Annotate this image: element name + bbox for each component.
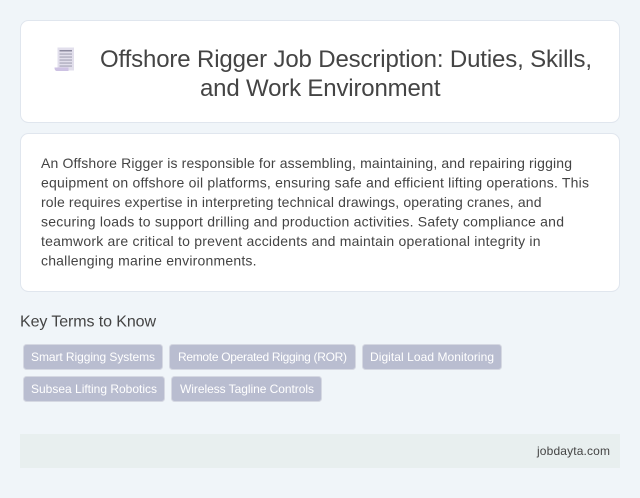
tag: remote operated rigging bbox=[170, 344, 356, 370]
text block: description: role requires expertise in interpreting technical drawings, operating cranes, and bbox=[41, 194, 542, 210]
title: Offshore Rigger Job Description: Duties, Skills, bbox=[100, 46, 592, 73]
text block: description bbox=[41, 155, 589, 268]
title: and Work Environment bbox=[200, 75, 441, 102]
tag: subsea lifting robotics: Subsea Lifting Robotics bbox=[31, 382, 157, 396]
tag: wireless tagline controls: Wireless Tagline Controls bbox=[180, 382, 314, 396]
text block: description: equipment on offshore oil platforms, ensuring safe and efficient lifting operations. This bbox=[41, 174, 589, 190]
text block: description: An Offshore Rigger is responsible for assembling, maintaining, and repairing rigging bbox=[41, 155, 572, 171]
panel: description card bbox=[20, 134, 620, 292]
tag: wireless tagline controls bbox=[172, 376, 322, 402]
tag: subsea lifting robotics bbox=[24, 376, 164, 402]
icon: scroll document bbox=[54, 48, 74, 71]
tag: smart rigging systems: Smart Rigging Systems bbox=[31, 350, 155, 364]
tag: remote operated rigging: Remote Operated Rigging (ROR) bbox=[178, 350, 347, 364]
text block: description: teamwork are critical to prevent accidents and maintain operational integrity in bbox=[41, 233, 540, 249]
panel: header card bbox=[20, 20, 620, 122]
footer text: jobdayta.com bbox=[536, 444, 610, 458]
tag: smart rigging systems bbox=[24, 344, 162, 370]
tag: digital load monitoring: Digital Load Monitoring bbox=[370, 350, 494, 364]
heading: key terms: Key Terms to Know bbox=[20, 314, 156, 330]
title bbox=[100, 46, 592, 102]
tag: digital load monitoring bbox=[362, 344, 502, 370]
text block: description: challenging marine environments. bbox=[41, 252, 256, 268]
text block: description: securing loads to support drilling and production activities. Safety compliance and bbox=[41, 214, 564, 230]
footer bar bbox=[20, 434, 620, 468]
